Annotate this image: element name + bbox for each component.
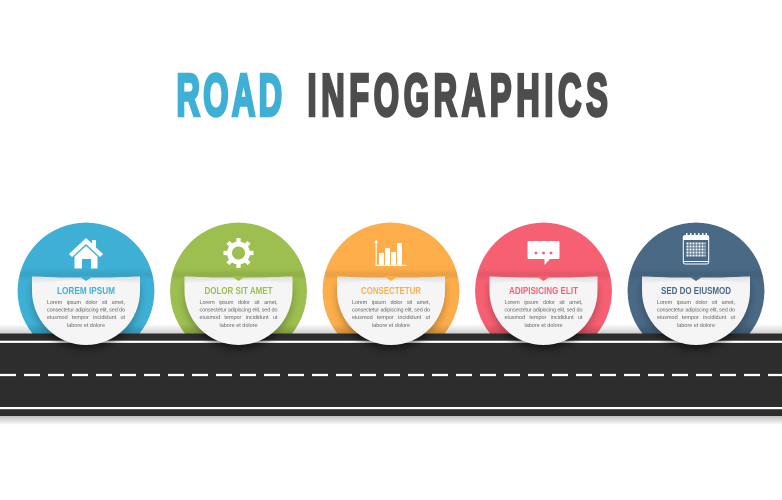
pointer [232,276,244,281]
circle 4 background [475,222,612,334]
text block [504,300,583,329]
heading: LOREM IPSUM [57,286,115,297]
text block: labore et dolore [220,323,258,329]
title: ROAD [176,63,282,129]
circle 2 background [170,222,307,334]
road shadow bottom [0,416,782,425]
circle 1 background [18,222,154,334]
text block: consectetur adipiscing elit, sed do [200,308,278,314]
road [0,334,782,416]
panel: lorem ipsum [32,238,140,345]
pointer [538,276,550,281]
panel: consectetur [337,240,445,345]
heading: SED DO EIUSMOD [661,286,731,297]
text block: labore et dolore [67,323,105,329]
icon: bar chart [374,240,406,266]
text block: consectetur adipiscing elit, sed do [352,308,430,314]
circle 3 background [322,222,460,334]
pointer [690,276,702,281]
text block: Lorem ipsum dolor sit amet, [657,300,735,306]
card shadows on road [47,334,735,350]
icon: house [69,238,103,268]
text block: eiusmod tempor incididunt ut [352,315,430,321]
text block: labore et dolore [524,323,562,329]
icon: gear [224,238,254,268]
text block [200,300,278,329]
pointer [80,276,92,281]
road shadow top [0,324,782,334]
text block: consectetur adipiscing elit, sed do [47,308,125,314]
pointer [385,276,397,281]
text block: eiusmod tempor incididunt ut [200,315,278,321]
text block [47,300,125,329]
text block: Lorem ipsum dolor sit amet, [47,300,125,306]
circle 5 background [628,222,764,334]
panel: dolor sit amet [184,238,292,345]
text block: Lorem ipsum dolor sit amet, [200,300,278,306]
text block [352,300,430,329]
text block: eiusmod tempor incididunt ut [657,315,735,321]
text block [657,300,735,329]
text block: eiusmod tempor incididunt ut [47,315,125,321]
text block: Lorem ipsum dolor sit amet, [504,300,583,306]
title: INFOGRAPHICS [308,63,608,129]
text block: consectetur adipiscing elit, sed do [657,308,735,314]
heading: ADIPISICING ELIT [509,286,578,297]
text block: Lorem ipsum dolor sit amet, [352,300,430,306]
title [176,63,608,129]
text block: labore et dolore [677,323,715,329]
text block: consectetur adipiscing elit, sed do [504,308,582,314]
icon: speech bubble [528,241,560,265]
panel: sed do eiusmod [642,233,750,345]
heading: CONSECTETUR [361,286,422,297]
heading: DOLOR SIT AMET [204,286,272,297]
icon: calendar [683,233,709,264]
text block: labore et dolore [372,323,410,329]
panel: adipisicing elit [490,241,598,345]
text block: eiusmod tempor incididunt ut [504,315,583,321]
